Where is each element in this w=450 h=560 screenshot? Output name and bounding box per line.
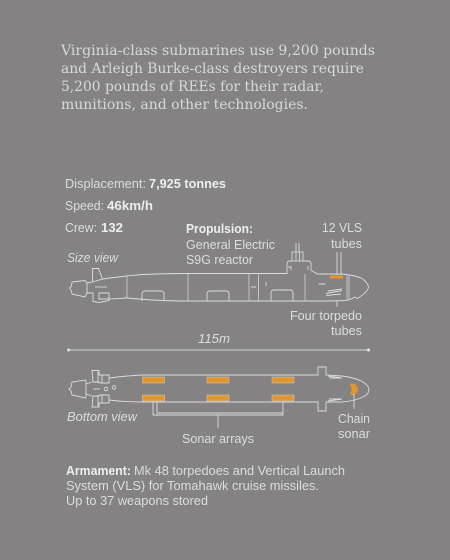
propulsion label: Propulsion: xyxy=(186,222,253,236)
sonar bracket xyxy=(153,402,283,415)
chain leader xyxy=(353,394,355,409)
intro text xyxy=(60,43,375,113)
bulkheads xyxy=(127,274,349,301)
armament text: System (VLS) for Tomahawk cruise missiles. xyxy=(66,479,319,493)
length arrow: 115m xyxy=(198,332,230,346)
label: chain sonar xyxy=(338,412,370,441)
label: chain sonar: sonar xyxy=(338,427,370,441)
label: size view: Size view xyxy=(67,251,119,265)
label: bottom view: Bottom view xyxy=(67,410,138,424)
stern box xyxy=(69,380,86,398)
top fin xyxy=(92,268,102,282)
sonar arrays xyxy=(142,377,164,383)
label: sonar arrays: Sonar arrays xyxy=(182,432,254,446)
hull outline xyxy=(109,367,369,411)
forward planes xyxy=(328,376,342,401)
intro text: munitions, and other technologies. xyxy=(61,97,308,113)
specifications: Displacement: xyxy=(65,177,146,191)
length arrow xyxy=(67,332,370,352)
diagram: submarine bottom view xyxy=(69,367,369,428)
label: four torpedo tubes xyxy=(290,309,362,338)
masts xyxy=(296,243,299,252)
armament text: Mk 48 torpedoes and Vertical Launch xyxy=(134,464,345,478)
VLS tubes xyxy=(330,276,343,278)
label: chain sonar: Chain xyxy=(338,412,370,426)
intro text: and Arleigh Burke-class destroyers require xyxy=(61,61,364,77)
stern plane xyxy=(99,293,109,299)
label: 12 VLS tubes xyxy=(322,221,362,251)
propulsion label: S9G reactor xyxy=(186,253,253,267)
specifications xyxy=(65,177,226,235)
specifications: 7,925 tonnes xyxy=(149,177,226,191)
stern link lines xyxy=(86,382,92,396)
specifications: 46km/h xyxy=(107,199,153,213)
stern fins xyxy=(92,370,109,407)
torpedo leader xyxy=(336,301,338,307)
label: 12 VLS tubes: tubes xyxy=(331,237,362,251)
armament text: Up to 37 weapons stored xyxy=(66,494,208,508)
VLS leader xyxy=(337,252,341,275)
specifications: 132 xyxy=(101,221,123,235)
sonar leader xyxy=(217,415,219,428)
hull outline xyxy=(87,261,368,302)
specifications: Speed: xyxy=(65,199,104,213)
label: four torpedo tubes: tubes xyxy=(331,324,362,338)
label: 12 VLS tubes: 12 VLS xyxy=(322,221,362,235)
propulsion label xyxy=(186,222,275,267)
specifications: Crew: xyxy=(65,221,97,235)
intro text: Virginia-class submarines use 9,200 pounds xyxy=(60,43,375,59)
stern details xyxy=(93,388,100,390)
armament text xyxy=(66,464,345,508)
ballast panels xyxy=(142,290,293,301)
intro text: 5,200 pounds of REEs for their radar, xyxy=(61,79,324,95)
torpedo tubes xyxy=(318,284,342,296)
diagram: submarine side view xyxy=(70,243,368,307)
chain sonar xyxy=(350,384,358,396)
armament text: Armament: xyxy=(66,464,131,478)
propulsion label: General Electric xyxy=(186,238,275,252)
label: four torpedo tubes: Four torpedo xyxy=(290,309,362,323)
stern box xyxy=(70,280,87,297)
